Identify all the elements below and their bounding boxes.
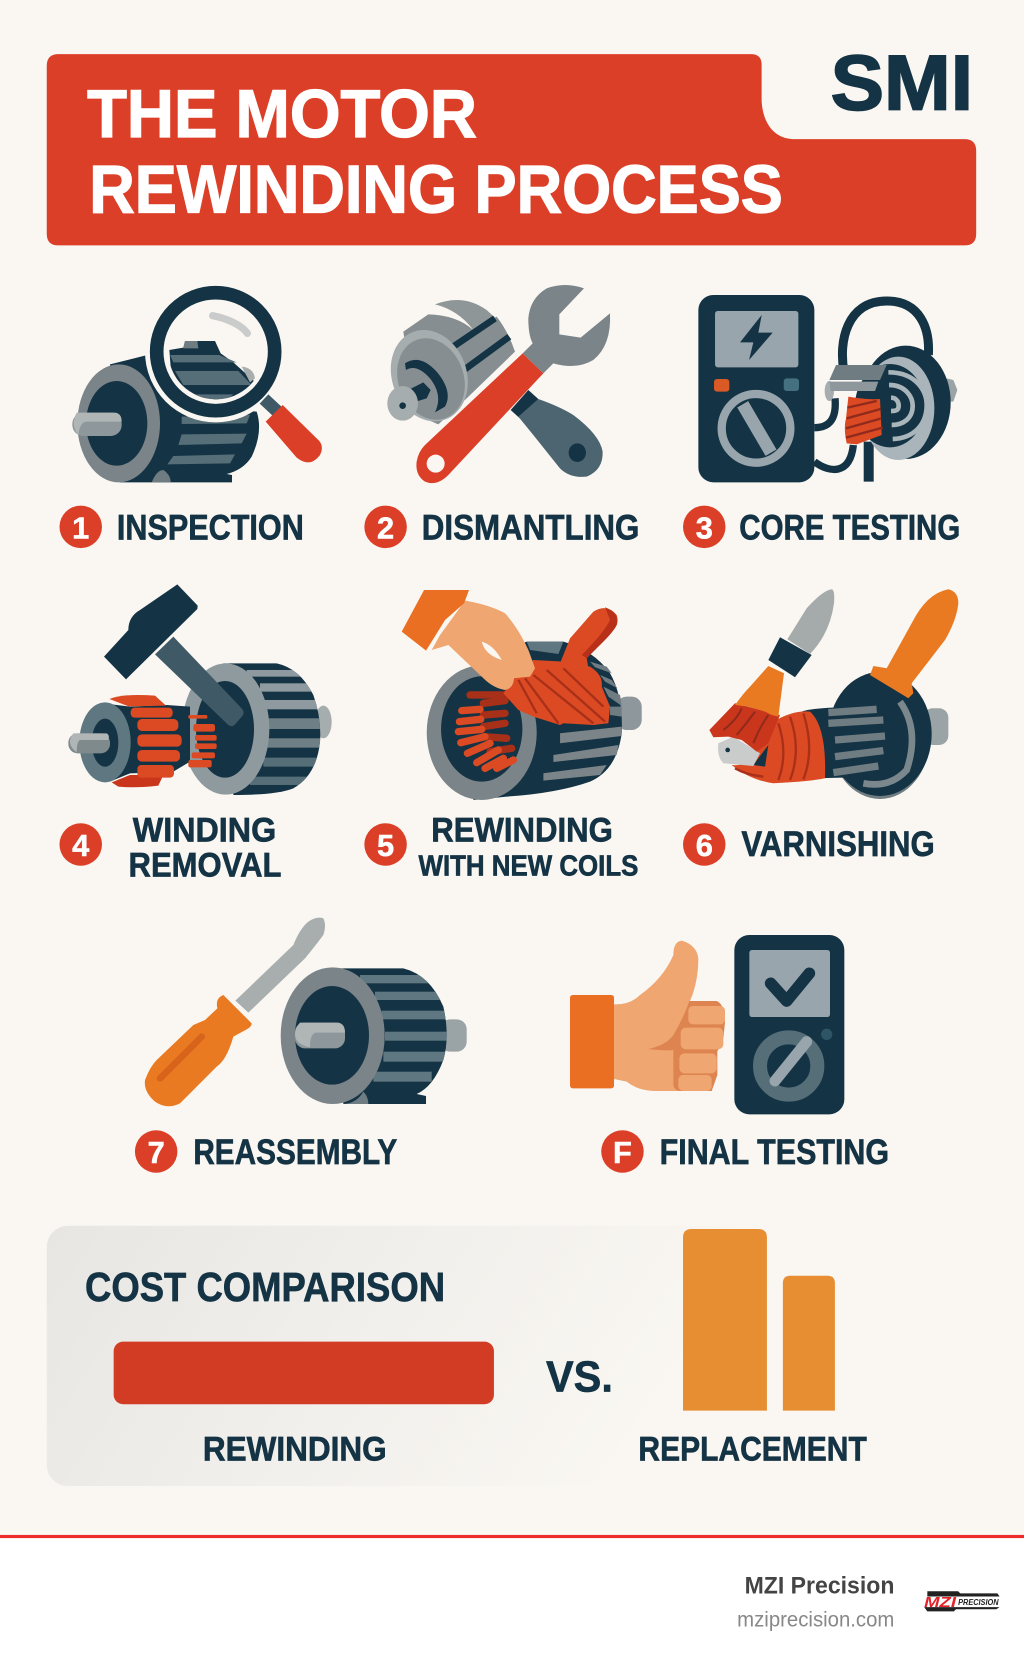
step 1 label: INSPECTION [117, 509, 304, 548]
step 2 label: DISMANTLING [422, 509, 639, 548]
vs label: VS. [546, 1354, 613, 1402]
step 3 label [683, 506, 960, 548]
step 5 label: WITH NEW COILS [419, 850, 638, 882]
MZI logo: PRECISION [958, 1598, 999, 1607]
replacement bars [683, 1229, 835, 1411]
step 1 label: 1 [72, 511, 89, 546]
MZI logo [924, 1591, 1000, 1611]
step 4 label: REMOVAL [129, 846, 281, 884]
icon: hand rewinding new coils [402, 590, 642, 800]
icon: hammer removing windings [68, 584, 332, 795]
MZI logo: MZI [924, 1595, 957, 1611]
step 5 label [364, 811, 638, 882]
step F label [601, 1130, 889, 1173]
step 2 label: 2 [377, 511, 394, 546]
step F label: FINAL TESTING [660, 1133, 889, 1172]
icon: dismantled motor and wrench [378, 285, 610, 483]
icon: screwdriver and reassembled motor [145, 918, 467, 1106]
rewinding label: REWINDING [203, 1431, 387, 1469]
title: REWINDING PROCESS [89, 151, 783, 227]
replacement label: REPLACEMENT [638, 1431, 867, 1469]
step F label: F [613, 1135, 632, 1170]
step 6 label: VARNISHING [741, 825, 935, 864]
step 7 label: 7 [148, 1135, 165, 1170]
step 3 label: CORE TESTING [739, 509, 960, 548]
title: THE MOTOR [87, 76, 477, 152]
footer brand name: MZI Precision [745, 1572, 894, 1599]
step 7 label [135, 1130, 397, 1173]
footer website: mziprecision.com [737, 1607, 894, 1631]
step 3 label: 3 [696, 511, 713, 546]
step 4 label: 4 [72, 828, 89, 863]
SMI logo: SMI [831, 40, 973, 126]
icon: multimeter core test [698, 295, 957, 482]
panel: cost comparison [47, 1226, 867, 1486]
cost comparison heading: COST COMPARISON [85, 1264, 445, 1310]
step 4 label: WINDING [133, 811, 276, 849]
step 6 label: 6 [696, 828, 713, 863]
icon: motor under magnifying glass [72, 281, 322, 482]
step 6 label [683, 823, 935, 866]
title [87, 76, 783, 227]
footer [0, 1535, 1024, 1666]
rewinding bar [114, 1342, 494, 1404]
step 5 label: 5 [377, 828, 394, 863]
step 5 label: REWINDING [431, 811, 613, 849]
step 7 label: REASSEMBLY [193, 1133, 397, 1172]
step 4 label [59, 811, 281, 884]
icon: varnishing with brush [709, 589, 958, 799]
icon: thumbs up and meter [570, 935, 844, 1114]
step 1 label [59, 506, 304, 548]
header banner [47, 54, 976, 245]
step 2 label [364, 506, 639, 548]
